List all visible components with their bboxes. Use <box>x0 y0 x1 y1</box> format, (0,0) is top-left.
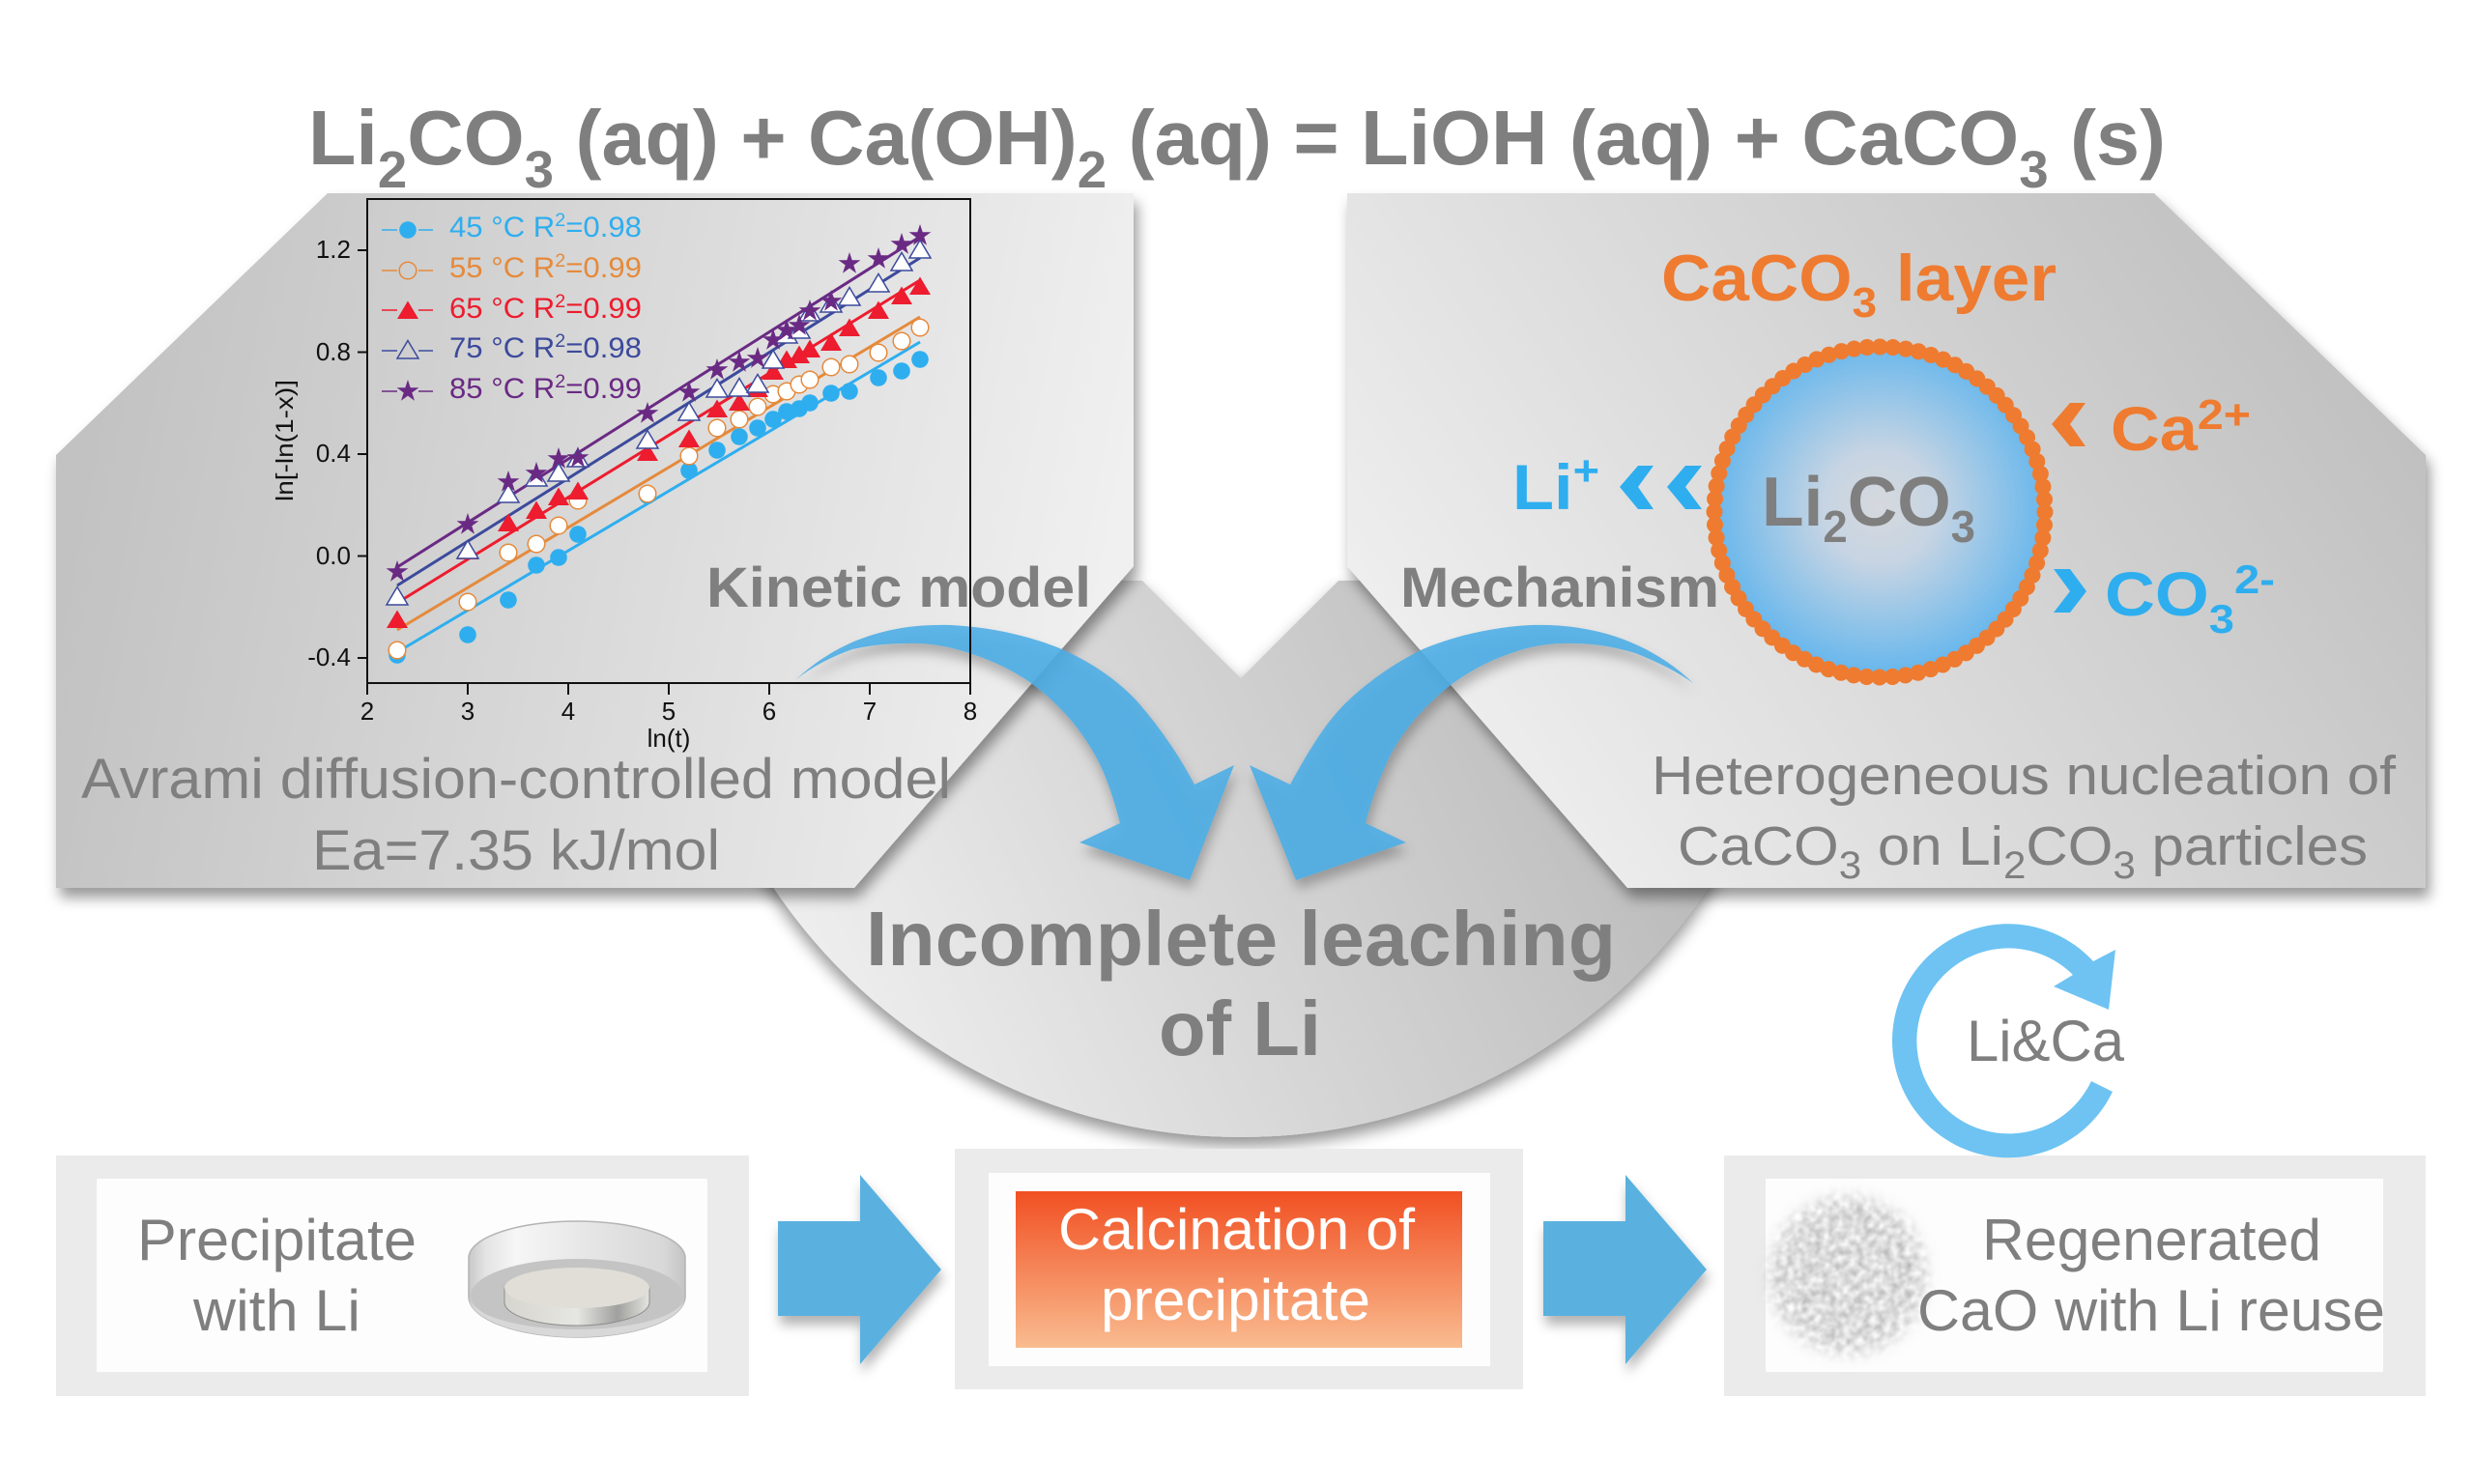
heading: Incomplete leaching of Li: of Li <box>1159 985 1321 1071</box>
title: reaction equation: 2 <box>378 141 407 199</box>
label: Li+: + <box>1573 447 1599 495</box>
legend: 2 <box>555 292 565 312</box>
heading: Incomplete leaching of Li: Incomplete leaching <box>866 896 1616 982</box>
y axis labels <box>307 235 351 671</box>
arrow: calcination to regenerated CaO <box>1543 1175 1707 1364</box>
title: reaction equation: 3 <box>525 141 554 199</box>
text: Precipitate with Li: Precipitate <box>137 1208 417 1272</box>
text block: nucleation description: CO <box>2026 815 2113 877</box>
text block: nucleation description: 3 <box>2113 844 2136 887</box>
x axis labels: 3 <box>461 697 475 726</box>
label: Li+: Li <box>1512 451 1569 523</box>
label: Ca2+: 2+ <box>2198 391 2251 439</box>
process box: calcination of precipitate <box>955 1149 1523 1389</box>
icon: blue double chevron outward <box>1620 466 1702 509</box>
y axis labels: -0.4 <box>307 642 351 671</box>
title: reaction equation: CO <box>407 95 525 181</box>
text block: nucleation description: particles <box>2136 815 2368 877</box>
particle: Li2CO3 core with CaCO3 shell: Li <box>1762 464 1824 541</box>
series: 45 C points <box>388 351 929 664</box>
legend <box>382 211 642 405</box>
label: Ca2+: Ca <box>2111 394 2190 464</box>
title: reaction equation: 2 <box>1078 141 1107 199</box>
heading: Kinetic model: Kinetic model <box>706 556 1091 619</box>
panel: central shield shape <box>678 575 1803 1137</box>
label: CO3 2-: 2- <box>2234 556 2275 602</box>
icon: Li and Ca recycling arrow <box>1892 924 2115 1157</box>
text: Precipitate with Li <box>137 1208 417 1343</box>
y axis labels: 1.2 <box>316 235 351 264</box>
x axis labels <box>360 697 977 753</box>
icon: petri dish with pellet <box>469 1221 685 1337</box>
legend: 85 °C R <box>449 373 551 405</box>
series: 65 C points <box>387 276 931 628</box>
chart frame and ticks <box>358 199 970 695</box>
y axis labels: 0.0 <box>316 541 351 570</box>
heading: Incomplete leaching of Li <box>866 896 1616 1071</box>
icon: CaO powder <box>1769 1197 1926 1354</box>
title: reaction equation: (aq) + Ca(OH) <box>554 95 1078 181</box>
panel: kinetic model background <box>56 193 1134 888</box>
title: reaction equation: (aq) = LiOH (aq) + CaCO <box>1107 95 2019 181</box>
y axis labels: 0.4 <box>316 439 351 468</box>
label: CO3 2-: 3 <box>2209 596 2234 642</box>
x axis labels: 7 <box>863 697 877 726</box>
text: Calcination of precipitate: precipitate <box>1101 1268 1370 1332</box>
x axis labels: 5 <box>662 697 676 726</box>
text block: nucleation description: CaCO <box>1678 815 1830 877</box>
x axis labels: 4 <box>561 697 575 726</box>
text block: Avrami model description: Ea=7.35 kJ/mol <box>312 819 720 882</box>
label: CO3 2-: CO <box>2105 559 2198 629</box>
text block: nucleation description: 2 <box>2003 844 2026 887</box>
text: Calcination of precipitate: Calcination of <box>1058 1197 1415 1262</box>
x axis labels: 8 <box>964 697 977 726</box>
particle: Li2CO3 core with CaCO3 shell <box>1714 347 2045 677</box>
text block: nucleation description: 3 <box>1839 844 1861 887</box>
legend: =0.99 <box>565 373 642 405</box>
text: Precipitate with Li: with Li <box>192 1278 360 1343</box>
text: Regenerated CaO with Li reuse <box>1917 1208 2385 1343</box>
text: Calcination of precipitate <box>1058 1197 1415 1332</box>
text: Regenerated CaO with Li reuse: CaO with Li reuse <box>1917 1278 2385 1343</box>
legend: 45 °C R <box>449 212 551 243</box>
text block: nucleation description: Heterogeneous nucleation of <box>1652 745 2396 807</box>
y axis labels: 0.8 <box>316 337 351 366</box>
legend: 65 °C R <box>449 293 551 325</box>
x axis labels: ln(t) <box>647 724 690 753</box>
legend: =0.98 <box>565 332 642 364</box>
x axis labels: 6 <box>762 697 776 726</box>
legend: 2 <box>555 331 565 352</box>
icon: blue chevron outward <box>2054 569 2086 613</box>
legend: 2 <box>555 251 565 271</box>
legend: =0.99 <box>565 252 642 284</box>
heading: Mechanism: Mechanism <box>1400 556 1719 619</box>
text block: nucleation description <box>1652 745 2396 887</box>
mechanism label: CaCO3 layer: CaCO <box>1661 242 1844 315</box>
mechanism label: CaCO3 layer: 3 <box>1853 279 1877 327</box>
arrow: curved from kinetic model to incomplete leaching <box>795 625 1234 880</box>
particle: Li2CO3 core with CaCO3 shell: CO <box>1848 464 1951 541</box>
panel: mechanism background <box>1347 193 2426 888</box>
series: 55 C points <box>388 319 929 659</box>
text: Regenerated CaO with Li reuse: Regenerated <box>1982 1208 2321 1272</box>
x axis labels: 2 <box>360 697 374 726</box>
title: reaction equation: (s) <box>2049 95 2166 181</box>
legend: 75 °C R <box>449 332 551 364</box>
text block: Avrami model description: Avrami diffusion-controlled model <box>81 748 951 811</box>
title: reaction equation: Li <box>308 95 377 181</box>
particle: Li2CO3 core with CaCO3 shell: 3 <box>1951 501 1975 552</box>
fit lines <box>397 237 920 652</box>
legend: =0.98 <box>565 212 642 243</box>
legend: 2 <box>555 211 565 231</box>
arrow: curved from mechanism to incomplete leaching <box>1250 625 1693 880</box>
series: 85 C points <box>387 224 931 582</box>
title: reaction equation: 3 <box>2019 141 2049 199</box>
icon: orange chevron inward <box>2052 403 2086 446</box>
legend: 55 °C R <box>449 252 551 284</box>
text block: nucleation description: on Li <box>1861 815 2003 877</box>
particle: Li2CO3 core with CaCO3 shell: 2 <box>1823 501 1848 552</box>
label: Li&Ca: Li&Ca <box>1967 1009 2125 1073</box>
process box: regenerated CaO <box>1724 1156 2426 1396</box>
series: 75 C points <box>387 240 931 605</box>
arrow: precipitate to calcination <box>778 1175 941 1364</box>
mechanism label: CaCO3 layer: layer <box>1877 242 2057 315</box>
process box: precipitate with Li <box>56 1156 749 1396</box>
legend: 2 <box>555 372 565 392</box>
text block: Avrami model description <box>81 748 951 882</box>
y axis title: ln[-ln(1-x)] <box>272 380 299 501</box>
chart: Avrami kinetic plot <box>272 199 977 753</box>
legend: =0.99 <box>565 293 642 325</box>
